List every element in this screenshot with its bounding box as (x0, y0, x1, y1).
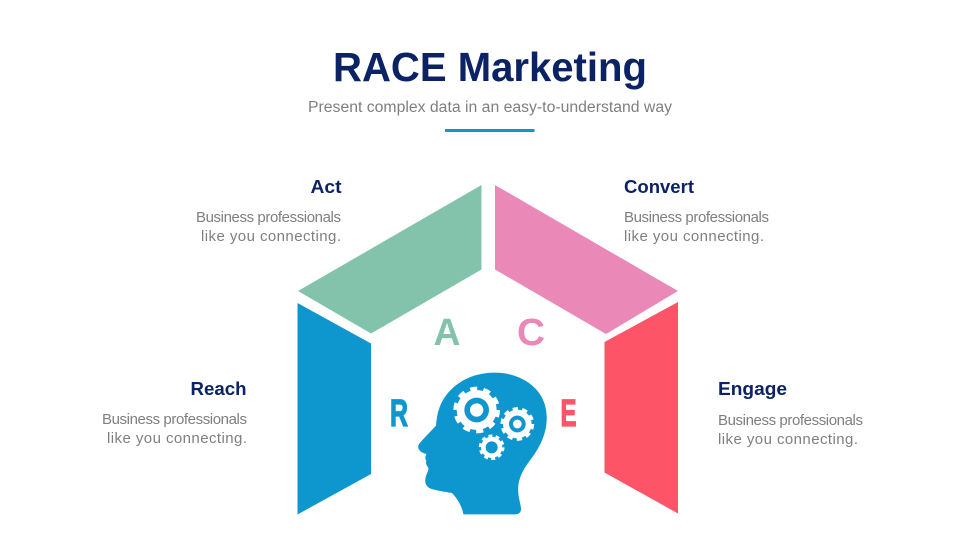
text block: Engage description: like you connecting. (718, 431, 858, 448)
panel: Reach text (102, 378, 247, 447)
head silhouette (418, 373, 547, 514)
heading: Engage: Engage (718, 378, 787, 399)
text block: Act description (196, 209, 341, 245)
panel: Convert text (624, 176, 769, 245)
house segment: Engage red (604, 302, 678, 514)
text block: Reach description: Business professionals (102, 411, 247, 428)
text block: Reach description (102, 411, 247, 447)
house segment: Act teal (298, 185, 482, 334)
heading: Convert: Convert (624, 176, 694, 197)
text block: Act description: Business professionals (196, 209, 341, 226)
text block: Engage description: Business professionals (718, 412, 863, 429)
letter E: E (560, 393, 576, 435)
title: RACE Marketing (333, 44, 647, 90)
panel: Engage text (718, 378, 863, 448)
house segment: Reach blue (298, 303, 371, 514)
panel: Act text (196, 176, 342, 245)
letter A: A (434, 312, 460, 354)
text block: Convert description: like you connecting. (624, 228, 764, 245)
text block: Engage description (718, 412, 863, 448)
icon: head with gears (418, 373, 547, 514)
small gear (480, 436, 503, 459)
text block: Act description: like you connecting. (201, 228, 341, 245)
large gear (456, 389, 498, 431)
medium gear (502, 409, 533, 439)
title underline (445, 129, 534, 132)
letter C: C (517, 312, 545, 354)
text block: Convert description: Business professionals (624, 209, 769, 226)
text block: Reach description: like you connecting. (107, 430, 247, 447)
letter R: R (390, 393, 408, 435)
text block: Convert description (624, 209, 769, 245)
heading: Act: Act (310, 176, 342, 197)
heading: Reach: Reach (190, 378, 246, 399)
subtitle: Present complex data in an easy-to-understand way (308, 99, 672, 116)
house segment: Convert pink (495, 185, 678, 334)
